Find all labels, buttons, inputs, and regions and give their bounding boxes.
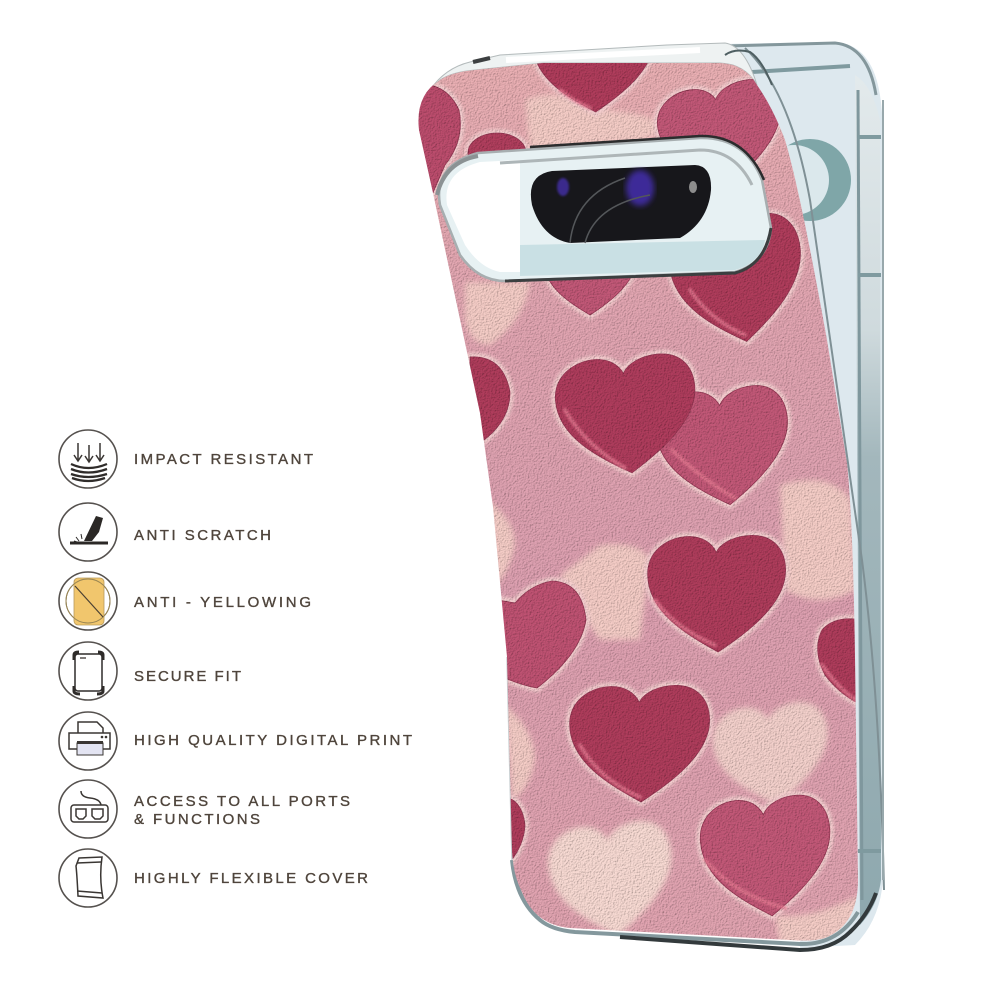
feature: access to all ports and functions (59, 780, 350, 838)
feature list (59, 430, 412, 907)
side band (855, 75, 881, 925)
feature: access to all ports and functions: & FUNCTIONS (134, 811, 260, 828)
feature: highly flexible cover (59, 849, 368, 907)
feature: impact resistant (59, 430, 313, 488)
clear left section (446, 160, 520, 272)
feature: secure fit (59, 642, 241, 700)
pale heart patches (465, 94, 860, 945)
feature: anti scratch (59, 503, 271, 561)
feature: anti yellowing: ANTI - YELLOWING (134, 594, 311, 611)
feature: access to all ports and functions: ACCESS TO ALL PORTS (134, 793, 350, 810)
feature: highly flexible cover: HIGHLY FLEXIBLE COVER (134, 870, 368, 887)
feature: secure fit: SECURE FIT (134, 668, 241, 685)
heart halos (433, 63, 856, 921)
feature: anti yellowing (59, 572, 311, 630)
hearts (428, 63, 856, 916)
glossy paint highlights (560, 90, 856, 908)
phone body behind the case (720, 42, 884, 948)
camera ring seen through the clear case (769, 139, 851, 221)
feature: impact resistant: IMPACT RESISTANT (134, 451, 313, 468)
camera lens bar (531, 165, 711, 243)
feature: high quality digital print (59, 712, 412, 770)
feature: anti scratch: ANTI SCRATCH (134, 527, 271, 544)
camera cutout bumper (437, 136, 771, 281)
clear case frame (430, 43, 876, 950)
feature: high quality digital print: HIGH QUALITY DIGITAL PRINT (134, 732, 412, 749)
printed case back: pink painted hearts (418, 63, 858, 941)
